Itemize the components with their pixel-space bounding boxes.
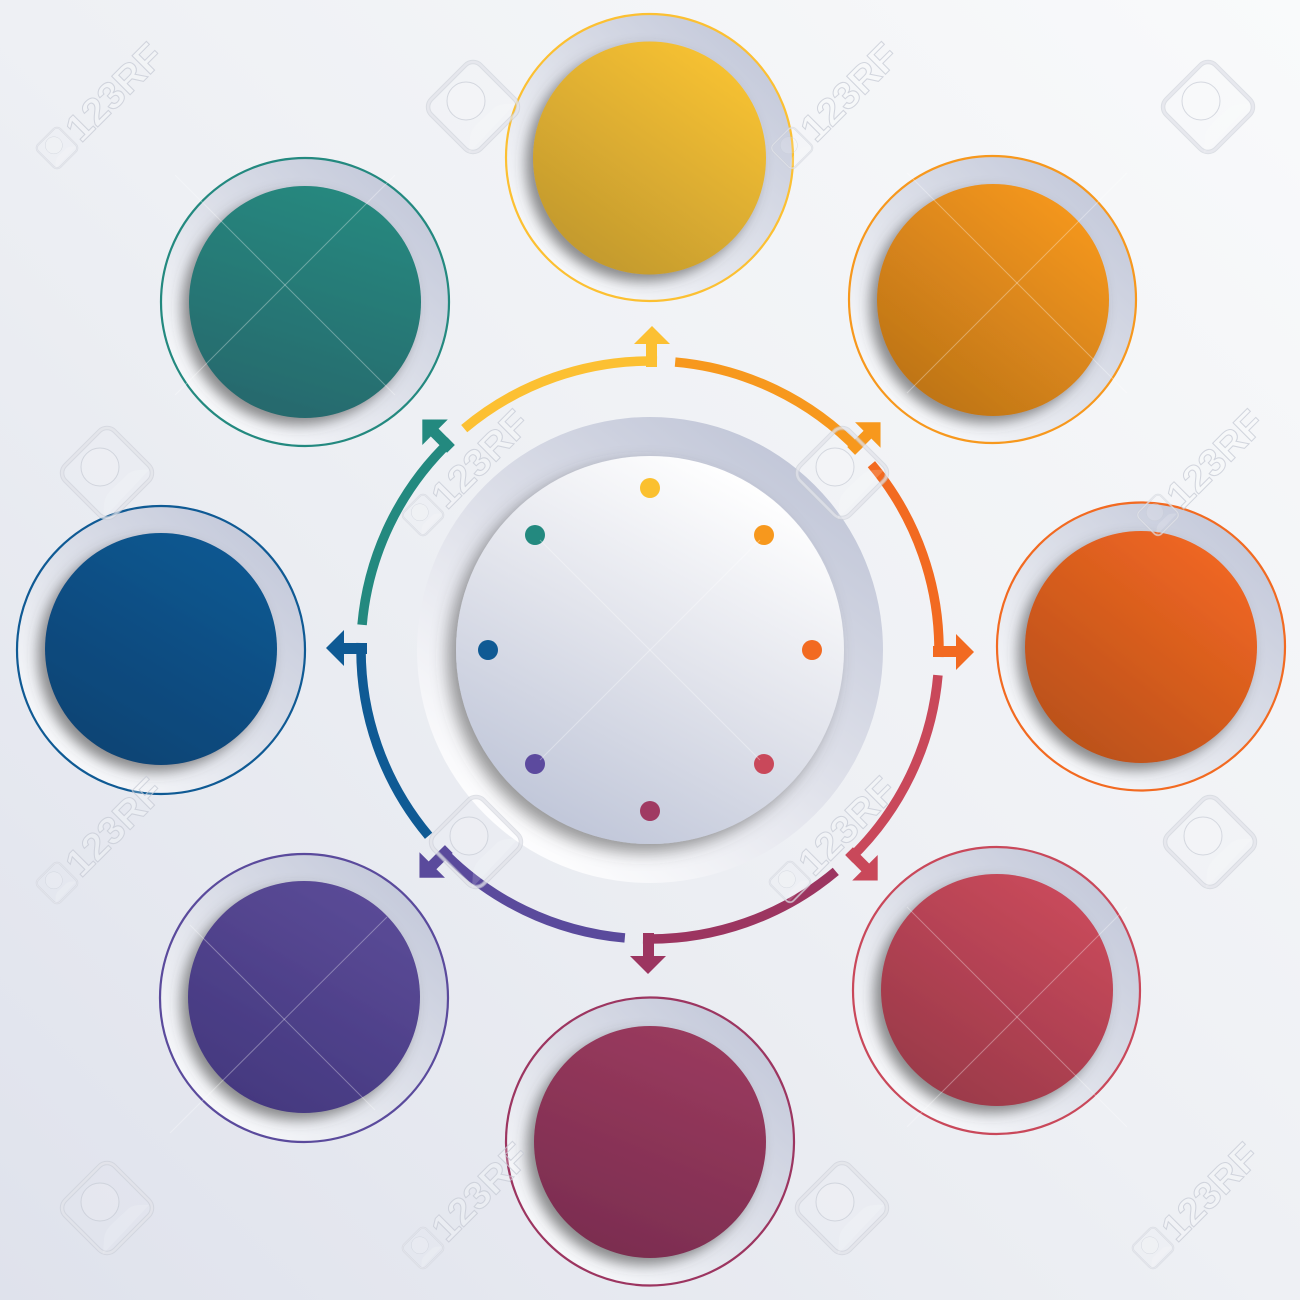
arrow: deep orange: [871, 464, 974, 670]
panel: maroon circle: [506, 998, 794, 1286]
panel: red circle: [853, 847, 1140, 1134]
watermarks: 123RF: [1159, 403, 1273, 517]
panel: orange circle: [849, 156, 1136, 443]
hub dots: [478, 478, 822, 821]
watermarks: 123RF: [791, 770, 905, 884]
central hub: [417, 417, 883, 883]
watermarks: 123RF: [1154, 1136, 1268, 1250]
panel: teal circle: [161, 158, 449, 446]
hub outer disc: [417, 417, 883, 883]
panel: yellow circle: [506, 14, 793, 301]
hub inner disc: [456, 456, 844, 844]
watermarks: 123RF: [58, 36, 172, 150]
watermarks: 123RF: [424, 403, 538, 517]
arrow: blue: [326, 630, 429, 836]
panel: blue circle: [17, 506, 305, 794]
panel: deep orange circle: [997, 502, 1285, 790]
arrow: purple: [407, 792, 625, 1010]
panel: purple circle: [160, 854, 448, 1142]
arrow: maroon: [630, 871, 836, 974]
watermarks: 123RF: [58, 771, 172, 885]
arrow ring: [290, 290, 1010, 1010]
arrow: orange: [675, 290, 893, 508]
arrow: yellow: [464, 326, 670, 429]
arrow: red: [792, 675, 1010, 893]
arrow: teal: [290, 407, 508, 625]
watermarks: 123RF: [424, 1136, 538, 1250]
watermarks: 123RF: [793, 36, 907, 150]
